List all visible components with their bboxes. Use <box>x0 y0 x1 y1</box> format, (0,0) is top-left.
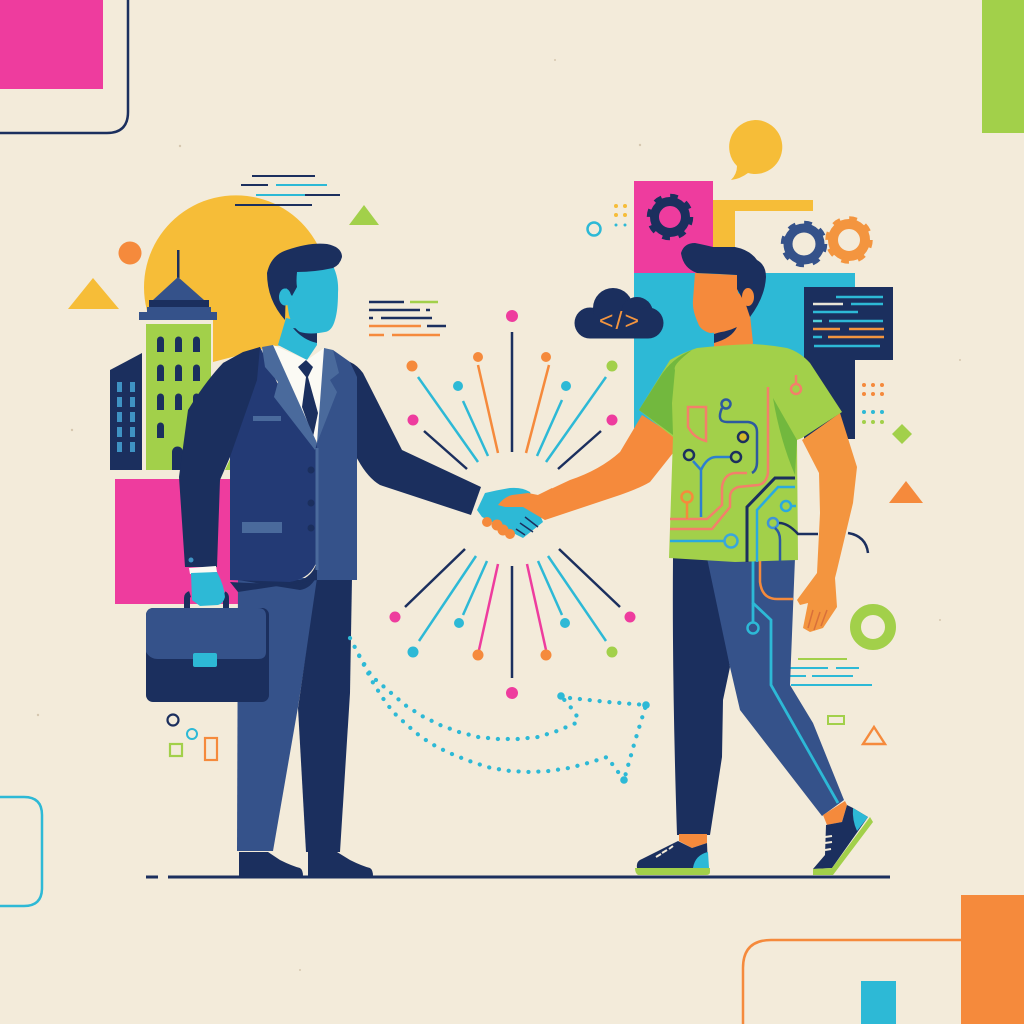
dev: shirt <box>639 344 868 562</box>
dev: legs <box>673 558 844 835</box>
sunburst rays <box>390 310 636 699</box>
businessman <box>146 244 481 876</box>
gear: orange <box>828 219 870 261</box>
dev: far arm <box>797 413 857 632</box>
cloud with code <box>574 288 664 338</box>
small dots and shapes <box>168 204 923 760</box>
briefcase <box>146 572 269 702</box>
code panel <box>804 287 893 439</box>
shirt: circuit traces <box>670 375 868 562</box>
dev: hand fingers <box>808 610 827 630</box>
man: neck and head <box>267 244 342 360</box>
gear: navy on pink <box>650 196 690 238</box>
dotted arrows <box>350 638 650 784</box>
dev: neck and head <box>681 243 766 363</box>
dev: forearm to handshake <box>498 415 673 520</box>
dev: shoes <box>635 801 873 875</box>
gear: blue <box>784 224 824 264</box>
speech bubble <box>729 120 782 180</box>
man: legs <box>237 578 352 852</box>
buildings <box>110 250 232 470</box>
man: cuff and hand <box>189 566 217 574</box>
developer <box>498 243 873 875</box>
handshake <box>477 488 560 539</box>
ground line <box>146 876 890 878</box>
right backdrop: tech blocks <box>168 120 923 760</box>
man: shirt and tie <box>273 345 324 440</box>
left backdrop: sun, shapes and notes <box>68 176 446 604</box>
man: shoes <box>239 852 373 876</box>
cloud with code: </> <box>599 307 641 335</box>
man: jacket <box>179 345 357 592</box>
man: far arm <box>340 362 481 515</box>
